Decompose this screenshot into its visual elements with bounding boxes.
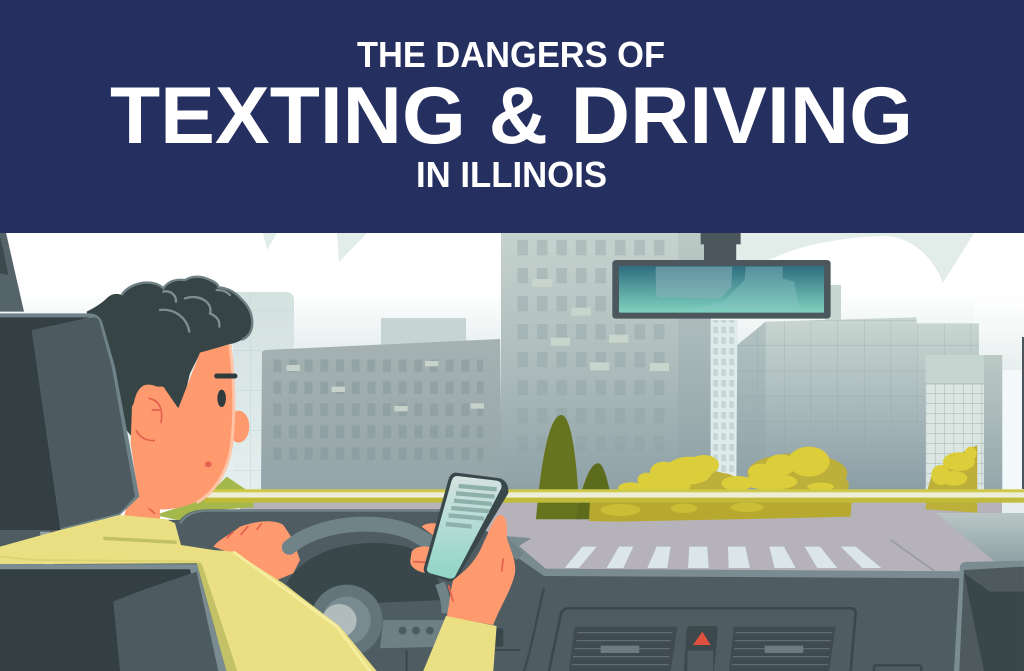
title [110,34,913,195]
tree: small cypress [576,463,616,519]
building: main tower [501,233,711,491]
steering wheel rim [289,524,520,613]
driver [87,277,252,530]
back fingers [410,523,443,573]
building: pale back tower [233,292,294,490]
ear [132,385,169,441]
building: wide office block [261,339,502,492]
holding hand [447,515,515,625]
hair [87,277,252,437]
building: light tower [711,320,737,487]
phone [424,473,508,581]
hazard button [684,626,718,671]
clouds [263,233,1024,504]
left hand on wheel [213,521,300,582]
title line 3: IN ILLINOIS [416,154,607,195]
dashboard [0,509,1024,671]
headrest [0,313,139,530]
sleeve [423,616,497,671]
mirror frame [612,260,831,319]
instrument strip [380,620,503,648]
tree: tall cypress [536,415,579,519]
crosswalk [565,547,881,568]
driver seat [32,532,64,587]
face [131,344,234,509]
title line 1: THE DANGERS OF [357,34,665,75]
steering column hub [311,585,383,657]
green bush behind driver [155,477,253,521]
right air vent [729,627,836,671]
neck [120,490,160,530]
eyebrow [217,368,235,383]
headrest post [32,532,64,587]
mouth [205,461,212,467]
bush: centre hedge [589,447,852,522]
wheel interior [287,543,443,607]
building: glass office [736,317,979,490]
nose [228,411,249,443]
dashboard reflection on windshield [936,513,1024,563]
mirror mount [701,232,741,261]
lower seat [0,563,237,671]
left air vent [569,627,677,671]
dash lower body [504,536,964,671]
building: back block behind mirror [825,285,841,325]
eye [217,390,226,407]
message lines [446,486,497,527]
sky background [0,232,1024,502]
rear-view mirror [612,232,831,319]
bush: right shrub [926,445,977,513]
steering assembly [287,543,520,671]
header band [0,0,1024,233]
glare line [891,540,934,571]
right hand and phone [410,473,515,671]
dash upper shelf [0,509,546,671]
trees and bushes [536,415,977,522]
shirt [0,515,377,671]
centre console panel [549,608,856,671]
right pillar [1022,337,1024,489]
windshield trim bar [205,489,1024,503]
mirror glass [619,266,824,313]
buildings [233,233,1002,523]
building: small distant block [381,318,466,348]
road [240,497,1002,600]
title line 2: TEXTING & DRIVING [110,71,913,161]
left pillar [0,233,24,312]
passenger seat [954,561,1024,671]
building: right grid tower [926,355,1002,523]
